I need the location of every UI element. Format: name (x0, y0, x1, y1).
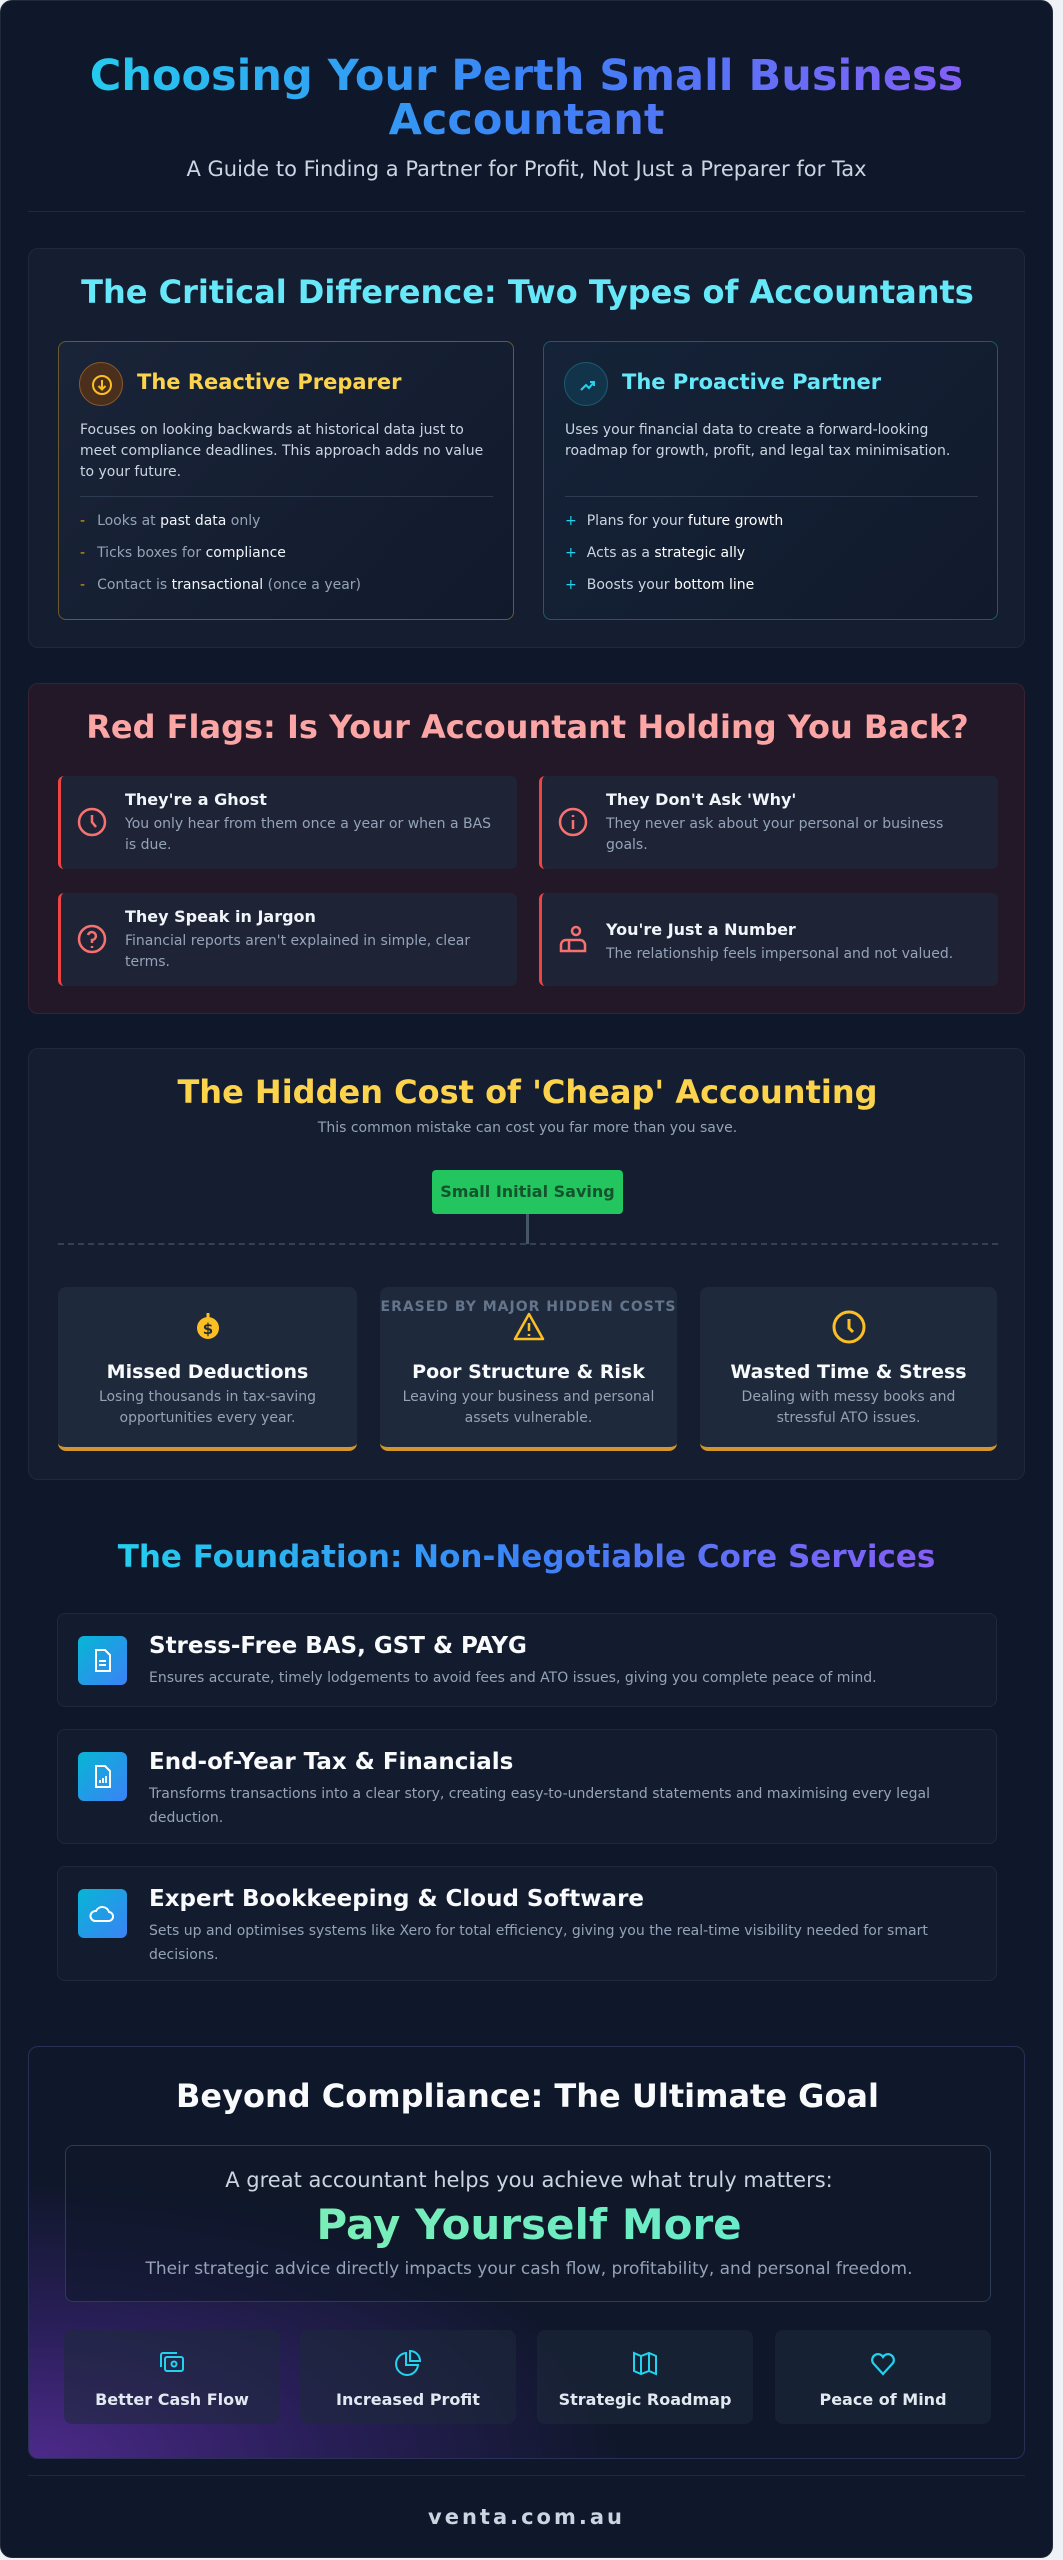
box: small initial saving: Small Initial Saving (440, 1182, 615, 1201)
label: erased by hidden costs: ERASED BY MAJOR HIDDEN COSTS (380, 1299, 676, 1315)
list: reactive: - Ticks boxes for compliance (80, 545, 286, 561)
callout: pay yourself more: A great accountant helps you achieve what truly matters: (225, 2168, 833, 2192)
box: small initial saving (432, 1170, 623, 1214)
card title: reactive: The Reactive Preparer (137, 370, 402, 394)
subtitle: A Guide to Finding a Partner for Profit, Not Just a Preparer for Tax (186, 157, 867, 181)
service: bookkeeping: Sets up and optimises systems like Xero for total efficiency, giving you the real-time visibility needed for smart decisions. (149, 1923, 928, 1963)
service: end of year: Transforms transactions into a clear story, creating easy-to-understand statements and maximising every legal deduction. (149, 1786, 930, 1826)
goal: cash flow: Better Cash Flow (95, 2390, 249, 2409)
goal: peace of mind (775, 2330, 991, 2424)
goal: profit: Increased Profit (336, 2390, 480, 2409)
list: proactive: + Boosts your bottom line (565, 577, 754, 593)
flag: ghost: They're a Ghost (125, 790, 267, 809)
card: reactive preparer (58, 341, 514, 620)
flag: why: They Don't Ask 'Why' (606, 790, 796, 809)
list: reactive: - Looks at past data only (80, 513, 260, 529)
connector line (526, 1214, 529, 1244)
list: reactive: - Contact is transactional (once a year) (80, 577, 361, 593)
flag: ghost: You only hear from them once a year or when a BAS is due. (125, 816, 491, 853)
goal: peace of mind: Peace of Mind (819, 2390, 947, 2409)
flag: jargon: Financial reports aren't explained in simple, clear terms. (125, 933, 470, 970)
footer: venta.com.au (428, 2505, 625, 2529)
list: proactive: + Plans for your future growth (565, 513, 783, 529)
callout: pay yourself more (65, 2145, 991, 2302)
icon: proactive (564, 362, 608, 406)
cost card: poor structure (380, 1287, 677, 1451)
panel: critical difference (28, 248, 1025, 648)
heading: foundation: The Foundation: Non-Negotiable Core Services (118, 1539, 935, 1575)
list: proactive: + Acts as a strategic ally (565, 545, 745, 561)
heading: critical difference: The Critical Difference: Two Types of Accountants (81, 273, 974, 311)
service: end of year (57, 1729, 997, 1844)
flag: ghost (58, 776, 517, 869)
heading: beyond compliance: Beyond Compliance: The Ultimate Goal (176, 2077, 879, 2115)
flag: number: The relationship feels impersonal and not valued. (606, 946, 953, 962)
service: BAS: Stress-Free BAS, GST & PAYG (149, 1633, 527, 1659)
cost card: wasted time: Dealing with messy books and stressful ATO issues. (742, 1389, 955, 1426)
flag: jargon (58, 893, 517, 986)
service: BAS: Ensures accurate, timely lodgements to avoid fees and ATO issues, giving you complete peace of mind. (149, 1670, 877, 1686)
cost card: wasted time: Wasted Time & Stress (730, 1361, 967, 1383)
flag: why (539, 776, 998, 869)
cost card: missed deductions (58, 1287, 357, 1451)
service: bookkeeping (57, 1866, 997, 1981)
flag: number (539, 893, 998, 986)
flag: number: You're Just a Number (606, 920, 796, 939)
card: proactive partner (543, 341, 998, 620)
cost card: poor structure: Leaving your business and personal assets vulnerable. (403, 1389, 654, 1426)
service: bookkeeping: Expert Bookkeeping & Cloud Software (149, 1886, 644, 1912)
subheading: This common mistake can cost you far more than you save. (318, 1120, 737, 1136)
card text: reactive: Focuses on looking backwards at historical data just to meet compliance deadlines. This approach adds no value to your future. (80, 422, 483, 480)
service: BAS (57, 1613, 997, 1707)
list: proactive (565, 513, 783, 593)
goal: roadmap (537, 2330, 753, 2424)
panel: hidden cost (28, 1048, 1025, 1480)
cost card: missed deductions: Losing thousands in tax-saving opportunities every year. (99, 1389, 316, 1426)
callout: pay yourself more: Pay Yourself More (316, 2200, 742, 2249)
goal: roadmap: Strategic Roadmap (559, 2390, 731, 2409)
card title: proactive: The Proactive Partner (622, 370, 881, 394)
cost card: poor structure: Poor Structure & Risk (412, 1361, 645, 1383)
cost card: missed deductions: Missed Deductions (107, 1361, 308, 1383)
icon: reactive (79, 362, 123, 406)
callout: pay yourself more: Their strategic advice directly impacts your cash flow, profitability, and personal freedom. (145, 2259, 913, 2279)
cost card: missed deductions: $ (203, 1320, 213, 1338)
panel: red flags (28, 683, 1025, 1014)
service: end of year: End-of-Year Tax & Financials (149, 1749, 513, 1775)
flag: why: They never ask about your personal or business goals. (606, 816, 943, 853)
heading: hidden cost: The Hidden Cost of 'Cheap' Accounting (177, 1073, 878, 1111)
cost card: wasted time (700, 1287, 997, 1451)
goal: cash flow (64, 2330, 280, 2424)
goal: profit (300, 2330, 516, 2424)
title: Choosing Your Perth Small Business Accountant (90, 51, 963, 145)
heading: red flags: Red Flags: Is Your Accountant Holding You Back? (86, 708, 969, 746)
list: reactive (80, 513, 361, 593)
card text: proactive: Uses your financial data to create a forward-looking roadmap for growth, profit, and legal tax minimisation. (565, 422, 950, 459)
panel: beyond compliance (28, 2046, 1025, 2459)
flag: jargon: They Speak in Jargon (125, 907, 316, 926)
